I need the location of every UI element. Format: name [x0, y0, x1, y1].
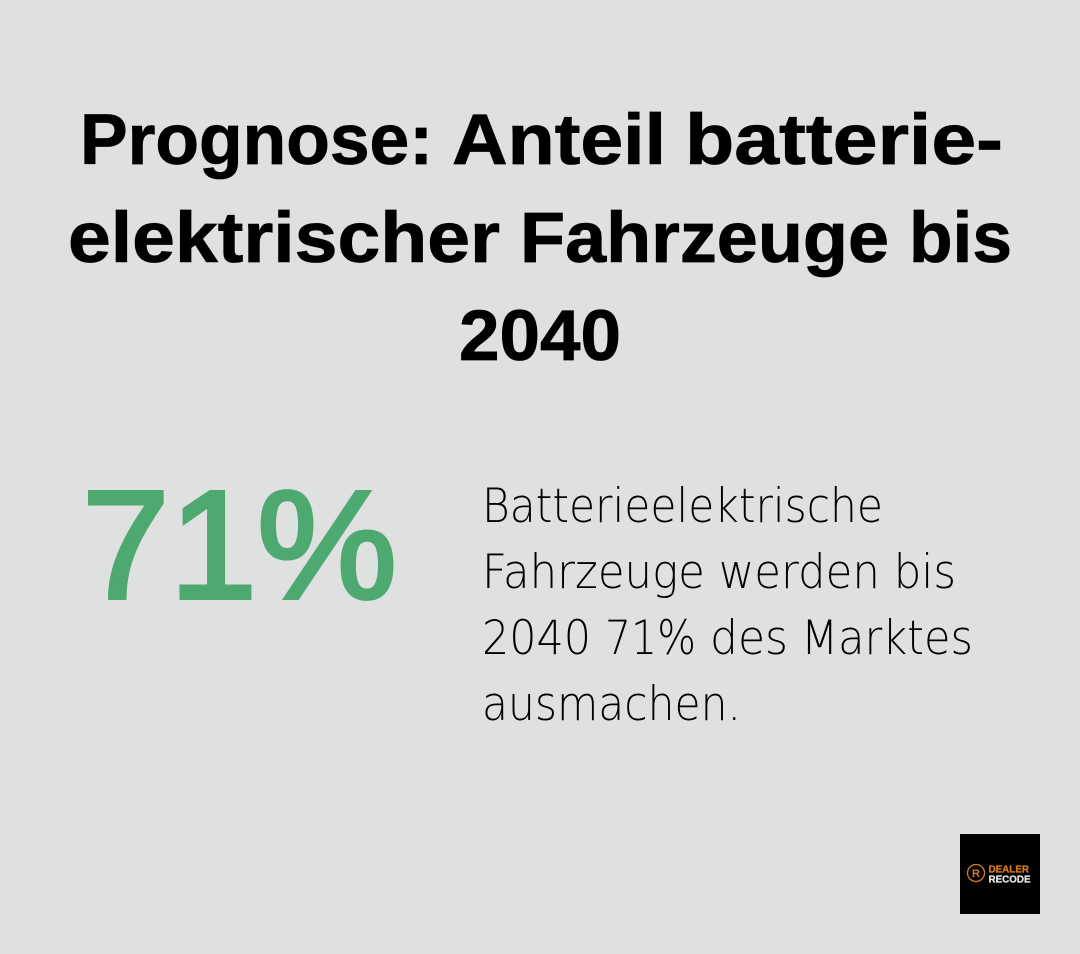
description text: 2040 — [482, 611, 591, 666]
logo wordmark: RECODE — [988, 873, 1030, 885]
logo wordmark — [988, 864, 1030, 885]
description text: Fahrzeuge werden bis — [482, 545, 956, 600]
title — [68, 101, 1012, 376]
title: 2040 — [459, 297, 621, 376]
title: Anteil — [452, 101, 666, 180]
icon: R emblem: R — [972, 868, 980, 880]
title: batterie- — [685, 101, 1003, 180]
logo: Dealer Recode — [960, 834, 1040, 914]
description text: des — [710, 611, 788, 666]
description text — [482, 479, 973, 732]
description text: ausmachen. — [482, 677, 741, 732]
title: elektrischer — [68, 199, 500, 278]
big stat: 71%: 71% — [82, 459, 397, 631]
logo wordmark: DEALER — [988, 864, 1029, 876]
description text: Batterieelektrische — [482, 479, 883, 534]
description text: 71% — [605, 611, 696, 666]
title: Fahrzeuge — [520, 199, 889, 278]
title: bis — [909, 199, 1012, 278]
title: Prognose: — [80, 101, 433, 180]
description text: Marktes — [801, 611, 973, 666]
